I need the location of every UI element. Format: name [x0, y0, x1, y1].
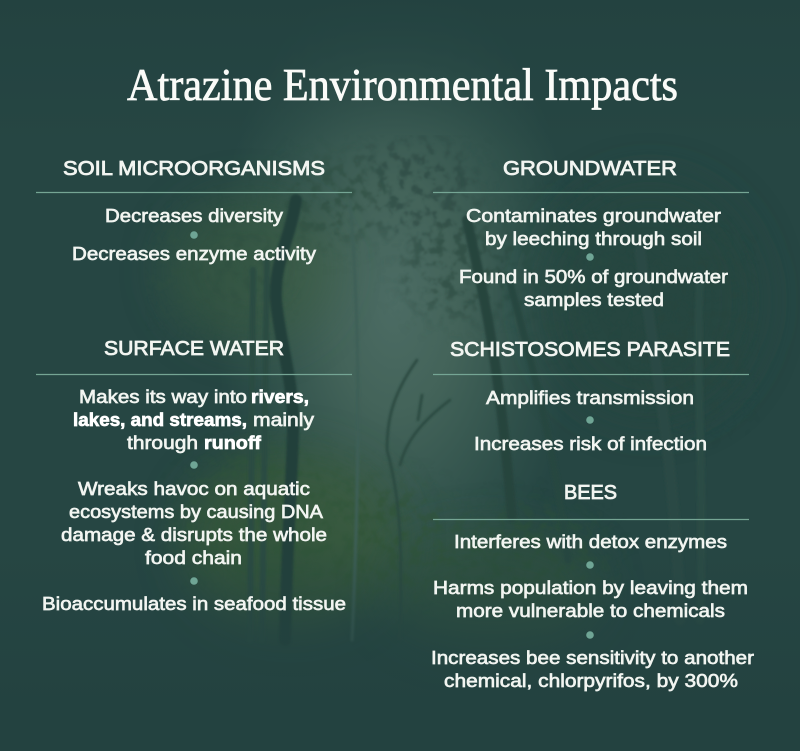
- panel: bees: [431, 482, 754, 691]
- text: aquatic ecosystem damage: Wreaks havoc on aquatic: [78, 479, 310, 499]
- text: found in 50% of samples: [459, 267, 728, 310]
- heading: bees: BEES: [564, 482, 617, 504]
- text: runoff into waterways: runoff: [204, 433, 262, 453]
- text: increases bee sensitivity: chemical, chlorpyrifos, by 300%: [444, 671, 738, 691]
- text: harms population: [433, 578, 748, 621]
- text: harms population: more vulnerable to chemicals: [456, 601, 725, 621]
- text: increases bee sensitivity: [431, 648, 754, 691]
- text: decreases diversity: Decreases diversity: [105, 206, 283, 226]
- panel: groundwater: [433, 158, 749, 310]
- text: runoff into waterways: mainly: [253, 410, 314, 430]
- panel: schistosomes parasite: [433, 339, 749, 454]
- title: Atrazine Environmental Impacts: [127, 60, 678, 110]
- text: amplifies transmission: Amplifies transmission: [486, 388, 694, 408]
- text: increases risk of infection: Increases risk of infection: [474, 434, 707, 454]
- panel: surface water: [36, 338, 352, 614]
- text: aquatic ecosystem damage: food chain: [145, 548, 242, 568]
- text: runoff into waterways: [73, 387, 314, 453]
- text: found in 50% of samples: samples tested: [524, 290, 664, 310]
- text: bioaccumulates: Bioaccumulates in seafood tissue: [42, 594, 346, 614]
- heading: soil microorganisms: SOIL MICROORGANISMS: [63, 158, 325, 180]
- text: runoff into waterways: rivers,: [251, 387, 309, 407]
- text: harms population: Harms population by leaving them: [433, 578, 748, 598]
- text: increases bee sensitivity: Increases bee sensitivity to another: [431, 648, 754, 668]
- heading: surface water: SURFACE WATER: [104, 338, 284, 360]
- text: aquatic ecosystem damage: [61, 479, 327, 568]
- text: interferes with detox enzymes: Interferes with detox enzymes: [454, 532, 727, 552]
- heading: schistosomes parasite: SCHISTOSOMES PARASITE: [450, 339, 730, 361]
- text: decreases enzyme activity: Decreases enzyme activity: [72, 244, 316, 264]
- text: aquatic ecosystem damage: ecosystems by causing DNA: [69, 502, 323, 522]
- panel: soil microorganisms: [36, 158, 352, 264]
- text: runoff into waterways: through: [127, 433, 198, 453]
- text: runoff into waterways: lakes, and streams,: [73, 410, 247, 430]
- text: contaminates groundwater: Contaminates groundwater: [466, 206, 721, 226]
- foliage texture: [145, 135, 760, 615]
- text: contaminates groundwater: by leeching through soil: [485, 229, 702, 249]
- text: runoff into waterways: Makes its way into: [79, 387, 247, 407]
- heading: groundwater: GROUNDWATER: [503, 158, 677, 180]
- text: found in 50% of samples: Found in 50% of groundwater: [459, 267, 728, 287]
- text: contaminates groundwater: [466, 206, 721, 249]
- text: aquatic ecosystem damage: damage & disrupts the whole: [61, 525, 327, 545]
